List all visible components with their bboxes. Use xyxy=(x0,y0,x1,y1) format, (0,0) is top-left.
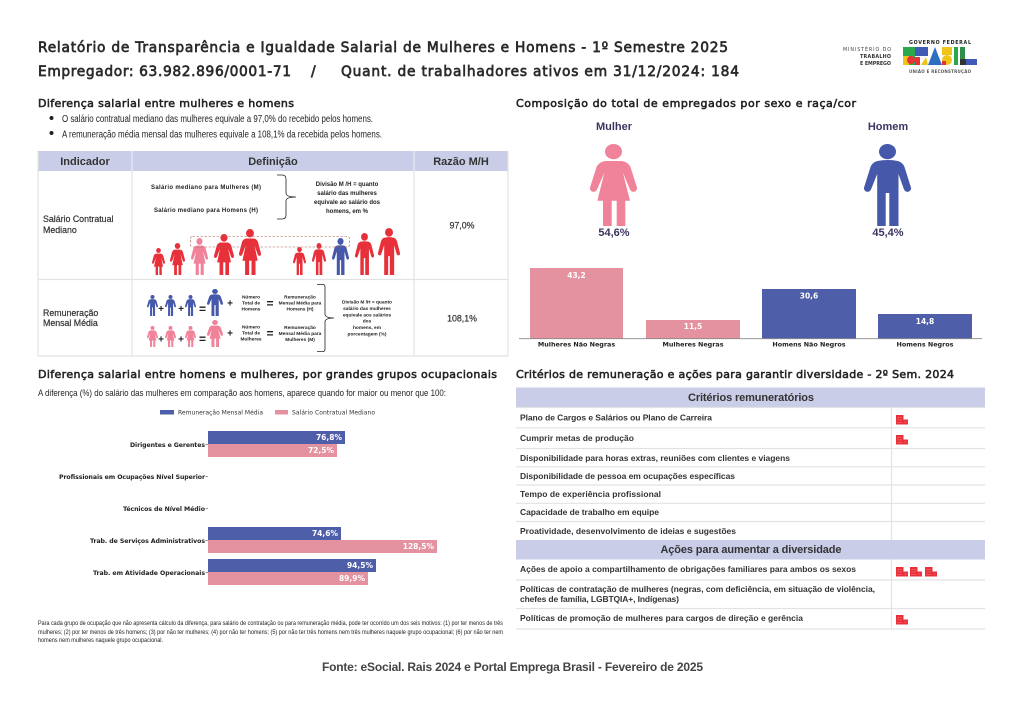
footnote: homens nem mulheres naquele grupo ocupacional. xyxy=(38,637,163,644)
criteria rows: Disponibilidade de pessoa em ocupações específicas xyxy=(520,471,735,481)
definition: men average: + xyxy=(227,298,233,310)
bar chart: grupos ocupacionais: Dirigentes e Gerentes xyxy=(130,442,205,449)
definition: median: Salário mediano para Mulheres (M) xyxy=(151,185,261,191)
logo: ministério do trabalho e emprego: TRABALHO xyxy=(860,54,891,60)
footnote: Para cada grupo de ocupação que não apresenta cálculo da diferença, para salário de contratação ou para remuneração média, pode ter ocorrido um dos seis motivos: (1) por ter menos de três xyxy=(38,620,503,627)
title xyxy=(38,40,739,80)
bracket and division text: Divisão M /H = quanto xyxy=(342,300,392,306)
definition: women average: Mulheres (M) xyxy=(285,337,315,343)
bar chart: sexo e raça: Mulheres Não Negras xyxy=(538,340,615,348)
bullet text: O salário contratual mediano das mulheres equivale a 97,0% do recebido pelos homens. xyxy=(62,114,373,125)
definition: women average: Mulheres xyxy=(240,336,262,342)
bar chart: grupos ocupacionais: 76,8% xyxy=(316,433,342,442)
definition: men average: Remuneração xyxy=(284,294,316,300)
bracket and division text: porcentagem (%) xyxy=(348,332,387,338)
bar chart: sexo e raça xyxy=(519,268,982,348)
row label: remuneração mensal média xyxy=(43,308,98,328)
logo: governo federal brasil: UNIÃO E RECONSTRUÇÃO xyxy=(909,69,972,74)
bullet text xyxy=(50,114,382,140)
bar chart: grupos ocupacionais: 94,5% xyxy=(347,561,373,570)
definition: women average: + xyxy=(178,334,184,346)
logo: ministério do trabalho e emprego: MINISTÉRIO DO xyxy=(843,45,891,53)
criteria rows: Plano de Cargos e Salários ou Plano de Carreira xyxy=(520,412,712,422)
title: / xyxy=(311,64,316,80)
figure: homem xyxy=(864,121,911,239)
footnote: mulheres; (2) por ter menos de três homens; (3) por não ter mulheres; (4) por não ter homens; (5) por não ter três homens nem três mulheres naquele grupo ocupacional; (6) por não ter nem xyxy=(38,629,503,636)
figure: mulher: Mulher xyxy=(596,121,633,133)
bar chart: sexo e raça: 11,5 xyxy=(684,322,702,331)
header: critérios remuneratórios: Critérios remuneratórios xyxy=(688,392,814,404)
action rows: chefes de família, LGBTQIA+, Indígenas) xyxy=(520,594,679,604)
bar chart: sexo e raça: Homens Negros xyxy=(897,340,954,348)
row label: salário contratual mediano xyxy=(43,214,113,235)
logo: ministério do trabalho e emprego xyxy=(843,45,891,67)
title: Relatório de Transparência e Igualdade Salarial de Mulheres e Homens - 1º Semestre 2025 xyxy=(38,40,728,56)
bar chart: sexo e raça: Homens Não Negros xyxy=(772,340,846,348)
definition: men average: Número xyxy=(242,294,260,300)
logo: ministério do trabalho e emprego: E EMPREGO xyxy=(860,61,891,67)
action rows: Políticas de promoção de mulheres para cargos de direção e gerência xyxy=(520,613,803,623)
action rows xyxy=(520,564,875,623)
legend xyxy=(160,410,375,416)
criteria rows xyxy=(520,412,790,536)
bar chart: grupos ocupacionais: Trab. em Atividade Operacionais xyxy=(93,570,205,577)
action rows: Ações de apoio a compartilhamento de obrigações familiares para ambos os sexos xyxy=(520,564,856,574)
figure: homem: Homem xyxy=(868,121,908,133)
row label: salário contratual mediano: Mediano xyxy=(43,225,77,235)
bar chart: grupos ocupacionais: 89,9% xyxy=(339,574,365,583)
median people illustration xyxy=(152,228,400,275)
row label: remuneração mensal média: Mensal Média xyxy=(43,318,98,328)
heading: diferença salarial: Diferença salarial entre mulheres e homens xyxy=(38,97,294,110)
bracket and division text: salário das mulheres xyxy=(343,306,391,312)
definition: women average: = xyxy=(199,332,206,346)
figure: homem: 45,4% xyxy=(872,227,904,239)
criteria rows: Disponibilidade para horas extras, reuniões com clientes e viagens xyxy=(520,453,790,463)
definition: men average: = xyxy=(199,302,206,316)
bar chart: grupos ocupacionais: Trab. de Serviços Administrativos xyxy=(90,538,205,545)
definition: women average: Mensal Média para xyxy=(279,331,322,337)
row label: remuneração mensal média: Remuneração xyxy=(43,308,98,318)
definition: median xyxy=(151,175,381,219)
definition: women average xyxy=(147,320,322,347)
average ratio: 108,1% xyxy=(447,314,477,324)
definition: men average xyxy=(147,289,322,316)
definition: women average: + xyxy=(227,328,233,340)
criteria rows: Tempo de experiência profissional xyxy=(520,489,661,499)
definition: median: Divisão M /H = quanto xyxy=(316,182,379,188)
icons: critérios xyxy=(896,415,908,444)
criteria rows: Proatividade, desenvolvimento de ideias e sugestões xyxy=(520,526,736,536)
panel: indicator table xyxy=(38,151,508,356)
definition: men average: = xyxy=(266,296,274,310)
figure: mulher: 54,6% xyxy=(598,227,630,239)
criteria rows: Capacidade de trabalho em equipe xyxy=(520,507,659,517)
table header: Razão M/H xyxy=(433,156,489,168)
logo: governo federal brasil: GOVERNO FEDERAL xyxy=(909,40,971,46)
bracket and division text: homens, em xyxy=(353,325,381,331)
bar chart: grupos ocupacionais: 128,5% xyxy=(403,542,434,551)
bar chart: sexo e raça: Mulheres Negras xyxy=(662,340,724,348)
bracket and division text: equivale aos salários xyxy=(343,312,391,318)
definition: men average: + xyxy=(158,304,164,315)
bracket and division text xyxy=(317,284,392,352)
table header: Definição xyxy=(248,156,298,168)
row label: salário contratual mediano: Salário Contratual xyxy=(43,214,113,224)
figure: mulher xyxy=(590,121,637,239)
definition: women average: Remuneração xyxy=(284,325,316,331)
definition: women average: Número xyxy=(242,324,260,330)
definition: men average: Total de xyxy=(242,300,260,306)
legend: Salário Contratual Mediano xyxy=(292,410,375,416)
title: Quant. de trabalhadores ativos em 31/12/2024: 184 xyxy=(341,64,739,80)
heading: critérios: Critérios de remuneração e ações para garantir diversidade - 2º Sem. 2024 xyxy=(516,368,954,381)
heading: composição: Composição do total de empregados por sexo e raça/cor xyxy=(516,97,856,110)
header: ações: Ações para aumentar a diversidade xyxy=(660,544,842,556)
bar chart: grupos ocupacionais: Profissionais em Ocupações Nível Superior xyxy=(59,473,206,481)
definition: men average: Mensal Média para xyxy=(279,300,322,306)
legend: Remuneração Mensal Média xyxy=(178,410,263,416)
heading: grupos ocupacionais: Diferença salarial entre homens e mulheres, por grandes grupos ocupacionais xyxy=(38,368,497,381)
definition: women average: + xyxy=(158,334,164,346)
table header xyxy=(60,156,489,168)
footnote xyxy=(38,620,503,644)
logo: governo federal brasil xyxy=(903,40,977,74)
definition: median: equivale ao salário dos xyxy=(314,200,381,206)
bar chart: grupos ocupacionais: Técnicos de Nível Médio xyxy=(123,505,205,513)
definition: men average: + xyxy=(178,304,184,315)
bar chart: sexo e raça: 14,8 xyxy=(916,317,934,326)
definition: men average: Homens (H) xyxy=(287,306,314,312)
source note: Fonte: eSocial. Rais 2024 e Portal Emprega Brasil - Fevereiro de 2025 xyxy=(322,660,703,674)
icons: ações xyxy=(896,567,937,624)
bullet text: A remuneração média mensal das mulheres equivale a 108,1% da recebida pelos homens. xyxy=(62,130,382,140)
bar chart: sexo e raça: 30,6 xyxy=(800,292,818,300)
bar chart: sexo e raça: 43,2 xyxy=(567,271,586,280)
bar chart: grupos ocupacionais: 74,6% xyxy=(312,529,338,538)
definition: men average: Homens xyxy=(242,306,261,312)
criteria rows: Cumprir metas de produção xyxy=(520,433,634,443)
definition: median: salário das mulheres xyxy=(317,191,378,197)
median ratio: 97,0% xyxy=(450,220,475,230)
bracket and division text: dos xyxy=(363,318,372,324)
bar chart: grupos ocupacionais: 72,5% xyxy=(308,446,334,455)
definition: median: homens, em % xyxy=(326,209,369,215)
definition: women average: = xyxy=(266,326,274,340)
definition: women average: Total de xyxy=(242,330,260,336)
definition: median: Salário mediano para Homens (H) xyxy=(154,208,258,214)
action rows: Políticas de contratação de mulheres (negras, com deficiência, em situação de violência, xyxy=(520,584,875,594)
subtitle: grupos ocupacionais: A diferença (%) do salário das mulheres em comparação aos homens, aparece quando for maior ou menor que 100: xyxy=(38,388,446,399)
panel: criteria table xyxy=(516,388,985,629)
table header: Indicador xyxy=(60,156,110,168)
title: Empregador: 63.982.896/0001-71 xyxy=(38,64,291,80)
bar chart: grupos ocupacionais xyxy=(59,431,437,585)
